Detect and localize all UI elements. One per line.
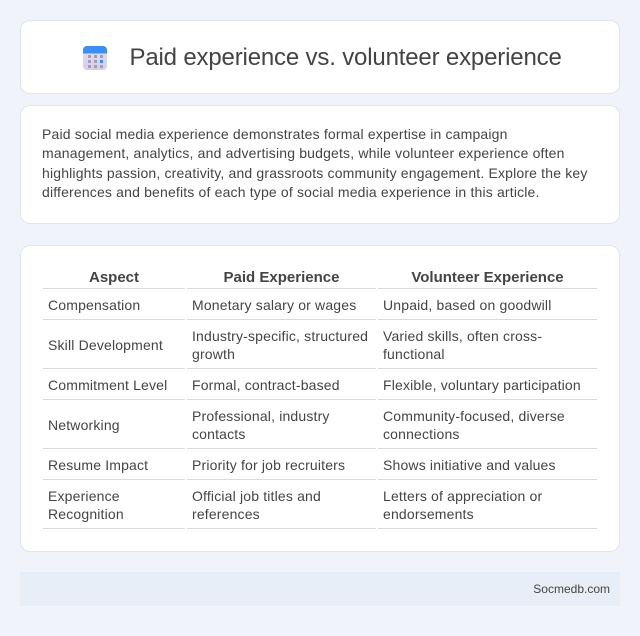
row: compensation: Unpaid, based on goodwill (383, 297, 551, 313)
row: skill development (48, 328, 542, 362)
row: networking: connections (383, 426, 460, 442)
row: experience recognition (48, 488, 542, 522)
table header (89, 269, 564, 286)
footer text: Socmedb.com (533, 582, 610, 596)
row: skill development: Varied skills, often cross- (383, 328, 542, 344)
row: networking: contacts (192, 426, 246, 442)
row: skill development: Skill Development (48, 337, 163, 353)
row: resume impact: Shows initiative and values (383, 457, 556, 473)
row: commitment level (48, 377, 581, 393)
row: experience recognition: Letters of appreciation or (383, 488, 542, 504)
text block: introduction: Paid social media experience demonstrates formal expertise in campaign (42, 126, 508, 142)
row: networking: Community-focused, diverse (383, 408, 565, 424)
title: Paid experience vs. volunteer experience (130, 44, 562, 71)
row: commitment level: Flexible, voluntary participation (383, 377, 581, 393)
row: resume impact: Priority for job recruiters (192, 457, 345, 473)
row: experience recognition: Official job titles and (192, 488, 321, 504)
text block: introduction (42, 126, 588, 200)
icon: calendar (83, 46, 107, 70)
row: commitment level: Formal, contract-based (192, 377, 340, 393)
table header: Paid Experience (224, 269, 339, 286)
row: networking (48, 408, 565, 442)
panel: introduction (20, 105, 620, 224)
row: skill development: growth (192, 346, 235, 362)
table header: Volunteer Experience (411, 269, 564, 286)
row: skill development: Industry-specific, structured (192, 328, 368, 344)
row: networking: Professional, industry (192, 408, 330, 424)
row: resume impact: Resume Impact (48, 457, 148, 473)
row: experience recognition: Experience (48, 488, 120, 504)
text block: introduction: highlights passion, creativity, and grassroots community engagement. Explore the key (42, 165, 588, 181)
table: comparison (43, 269, 597, 529)
text block: introduction: management, analytics, and advertising budgets, while volunteer experience often (42, 145, 565, 161)
row: compensation (48, 297, 551, 313)
panel: title card (20, 20, 620, 94)
row: experience recognition: Recognition (48, 506, 124, 522)
row: experience recognition: references (192, 506, 260, 522)
panel: comparison table (20, 245, 620, 552)
table header: Aspect (89, 269, 139, 286)
row: compensation: Monetary salary or wages (192, 297, 356, 313)
text block: introduction: differences and benefits of each type of social media experience in this article. (42, 184, 540, 200)
row: compensation: Compensation (48, 297, 140, 313)
row: commitment level: Commitment Level (48, 377, 167, 393)
row: experience recognition: endorsements (383, 506, 474, 522)
row: resume impact (48, 457, 556, 473)
row: skill development: functional (383, 346, 445, 362)
footer bar (20, 572, 620, 606)
row: networking: Networking (48, 417, 120, 433)
